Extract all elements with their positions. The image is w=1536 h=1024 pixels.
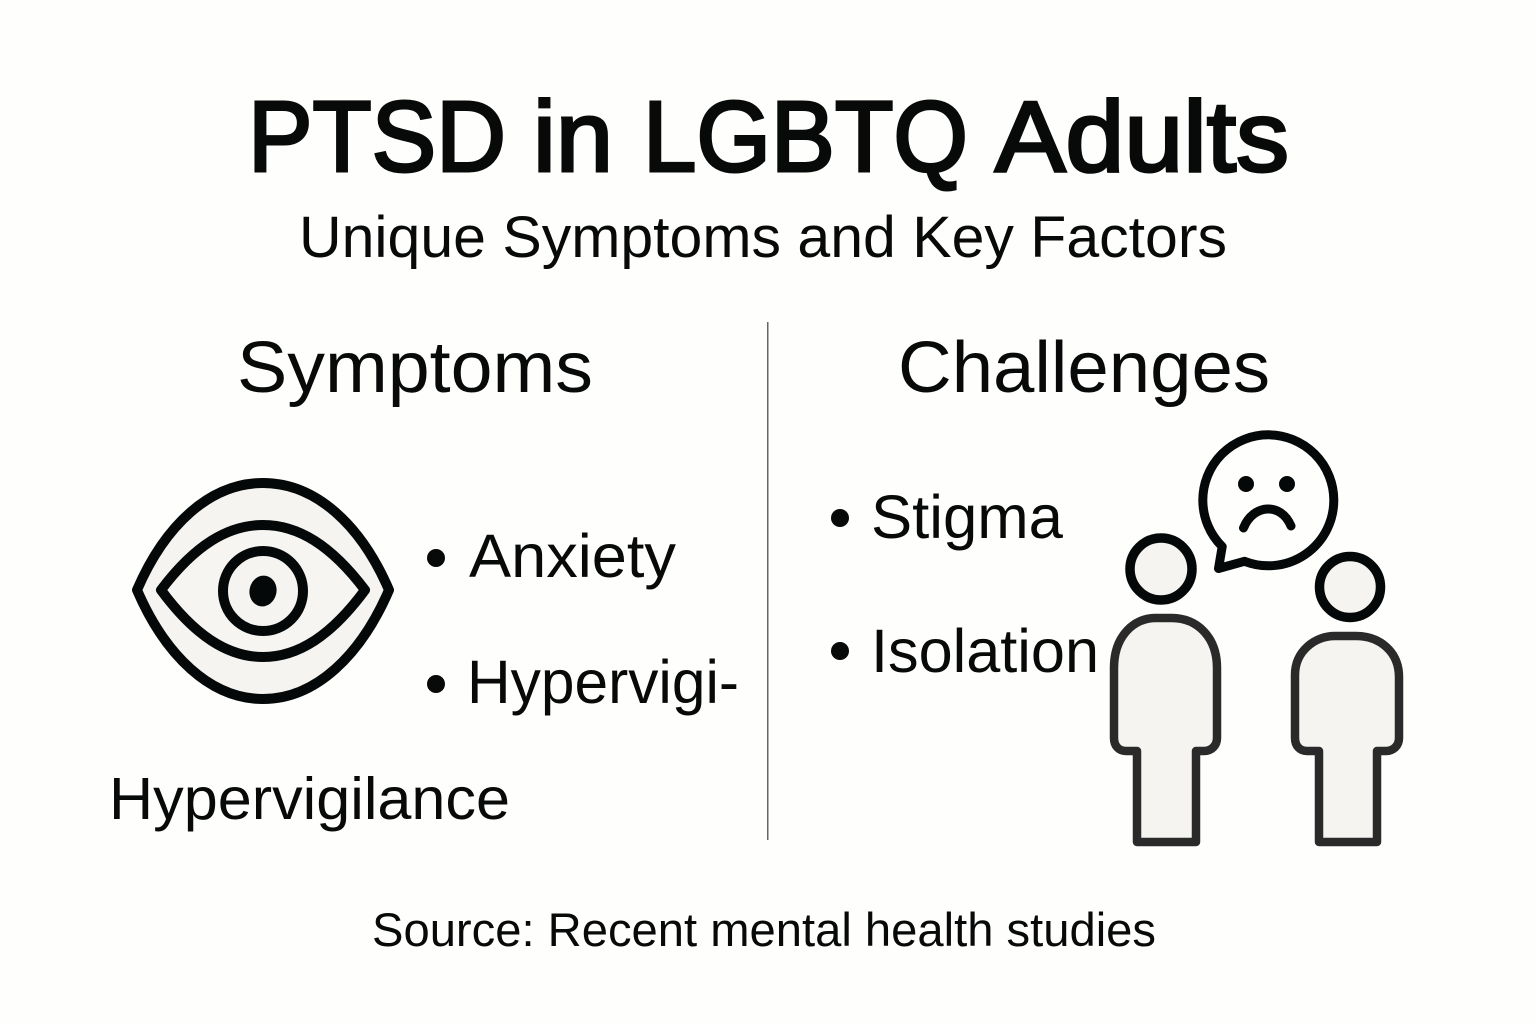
icon: left person bbox=[1114, 538, 1217, 842]
text: anxiety: Anxiety bbox=[469, 522, 677, 590]
bullet: isolation bbox=[831, 642, 849, 660]
text: hypervigi: Hypervigi- bbox=[467, 648, 739, 716]
icon: sad speech bubble bbox=[1203, 435, 1334, 568]
heading: symptoms: Symptoms bbox=[237, 328, 593, 408]
title: in bbox=[533, 81, 613, 193]
text: isolation: Isolation bbox=[871, 617, 1099, 685]
title bbox=[248, 81, 1289, 193]
subtitle: Unique Symptoms and Key Factors bbox=[299, 205, 1227, 270]
bullet: anxiety bbox=[427, 549, 445, 567]
center divider bbox=[767, 322, 768, 840]
icon: right person bbox=[1295, 556, 1399, 842]
bullet: stigma bbox=[831, 509, 849, 527]
title: Adults bbox=[995, 81, 1289, 193]
heading: challenges: Challenges bbox=[898, 328, 1270, 408]
symptom list bbox=[109, 522, 739, 832]
challenges list bbox=[831, 483, 1099, 685]
title: LGBTQ bbox=[643, 81, 968, 193]
bullet: hypervigi bbox=[427, 675, 445, 693]
title: PTSD bbox=[248, 81, 506, 193]
text: hypervigilance: Hypervigilance bbox=[109, 766, 510, 832]
icon: eye bbox=[137, 483, 389, 699]
text: stigma: Stigma bbox=[871, 483, 1063, 551]
source note: Source: Recent mental health studies bbox=[372, 903, 1156, 956]
